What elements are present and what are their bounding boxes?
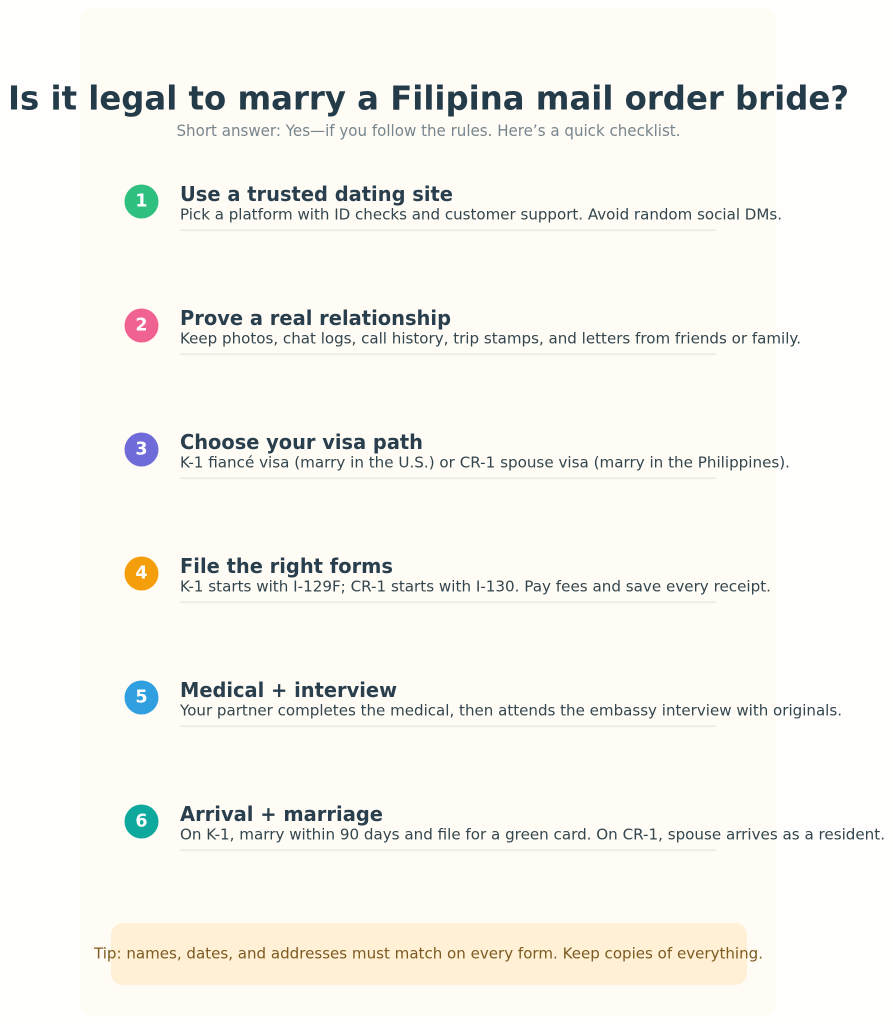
icon: number 4 badge: 4: [135, 564, 148, 584]
icon: number 3 badge: 3: [135, 440, 148, 460]
step 2 description: Keep photos, chat logs, call history, trip stamps, and letters from friends or family.: [180, 330, 801, 348]
icon: number 1 badge: 1: [135, 192, 148, 212]
step 4 description: K-1 starts with I-129F; CR-1 starts with I-130. Pay fees and save every receipt.: [180, 578, 771, 596]
icon: number 6 badge: 6: [135, 812, 148, 832]
icon: number 1 badge: [124, 184, 158, 218]
tip background: [111, 923, 747, 985]
icon: number 4 badge: [124, 556, 158, 590]
panel: background card: [80, 8, 776, 1016]
step 1 heading: Use a trusted dating site: [180, 182, 453, 206]
icon: number 6 badge: [124, 804, 158, 838]
icon: number 3 badge: [124, 432, 158, 466]
step 3: [124, 430, 790, 479]
step 5 heading: Medical + interview: [180, 678, 397, 702]
step 4: [124, 554, 771, 603]
step 3 description: K-1 fiancé visa (marry in the U.S.) or CR-1 spouse visa (marry in the Philippines).: [180, 454, 790, 472]
icon: number 2 badge: [124, 308, 158, 342]
title: Is it legal to marry a Filipina mail order bride?: [8, 80, 849, 118]
step 6 heading: Arrival + marriage: [180, 802, 383, 826]
icon: number 5 badge: [124, 680, 158, 714]
icon: number 5 badge: 5: [135, 688, 148, 708]
step 5: [124, 678, 842, 727]
step 3 heading: Choose your visa path: [180, 430, 423, 454]
step 5 description: Your partner completes the medical, then attends the embassy interview with originals.: [179, 702, 842, 720]
step 6 description: On K-1, marry within 90 days and file for a green card. On CR-1, spouse arrives as a resident.: [180, 826, 885, 844]
step 2 heading: Prove a real relationship: [180, 306, 451, 330]
step 6: [124, 802, 885, 851]
tip text: Tip: names, dates, and addresses must match on every form. Keep copies of everything.: [93, 944, 763, 962]
step 2: [124, 306, 801, 355]
step 4 heading: File the right forms: [180, 554, 393, 578]
icon: number 2 badge: 2: [135, 316, 148, 336]
step 1 description: Pick a platform with ID checks and customer support. Avoid random social DMs.: [180, 206, 782, 224]
step 1: [124, 182, 782, 231]
callout: tip: [93, 923, 763, 985]
subtitle: Short answer: Yes—if you follow the rules. Here’s a quick checklist.: [176, 121, 680, 140]
